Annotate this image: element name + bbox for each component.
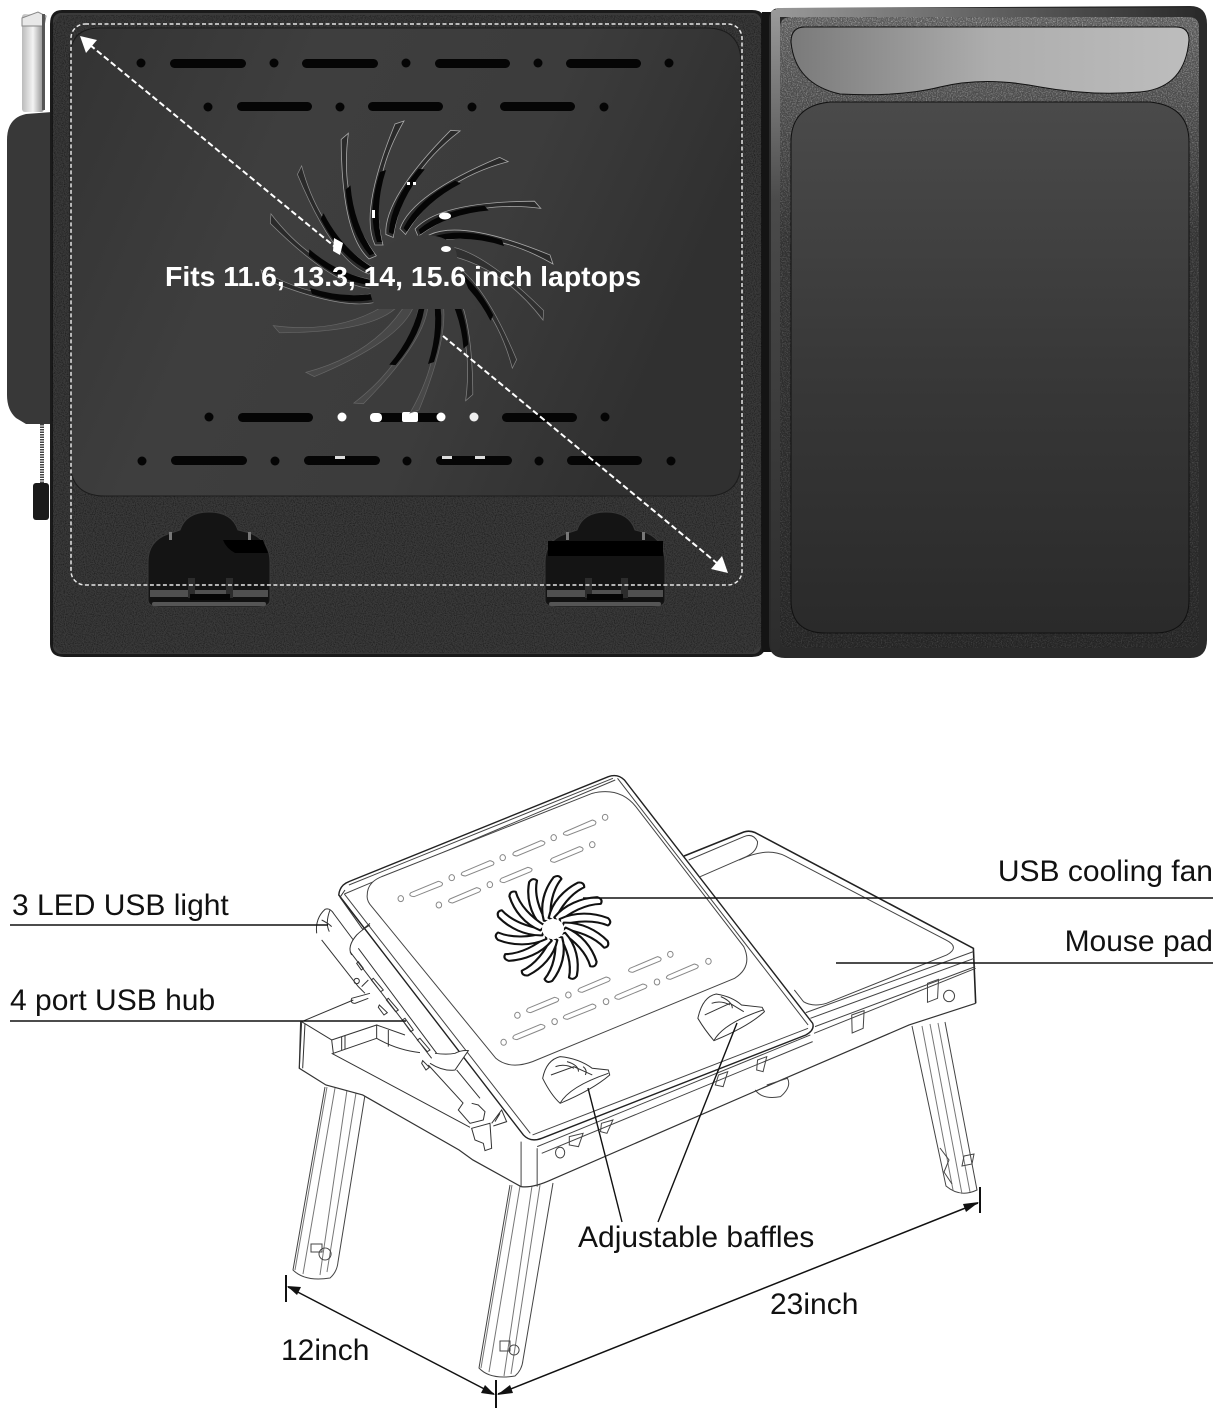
mouse pad surface	[791, 102, 1189, 633]
side USB hub tab	[7, 112, 52, 424]
icon: line drawing fan	[494, 875, 612, 983]
top vent row 2	[204, 102, 608, 112]
diagonal size arrow	[80, 36, 728, 573]
heading: laptop sizes: Fits 11.6, 13.3, 14, 15.6 inch laptops	[165, 261, 641, 292]
rear left leg	[293, 1087, 365, 1279]
bottom vent row 2	[138, 456, 676, 466]
right baffle	[545, 512, 665, 607]
cooling fan blades	[258, 118, 556, 416]
bottom vent row 1	[204, 412, 610, 422]
left baffle	[148, 512, 270, 607]
tray baffles	[543, 994, 764, 1103]
mouse pad deck	[299, 831, 976, 1187]
label: Adjustable baffles: Adjustable baffles	[578, 1221, 814, 1254]
rear right leg	[912, 1022, 977, 1194]
panel: laptop tray top view	[7, 10, 765, 657]
front left leg	[479, 1183, 553, 1377]
panel: mouse pad top view	[762, 6, 1207, 658]
panel edge	[769, 6, 1207, 658]
dimension: 23 inch width: 23inch	[770, 1288, 858, 1321]
wrist rest recess	[791, 27, 1189, 95]
top vent row 1	[136, 58, 674, 68]
panel hinge gap	[762, 12, 772, 652]
label: Mouse pad: Mouse pad	[1065, 925, 1213, 958]
label: USB cooling fan: USB cooling fan	[998, 855, 1213, 888]
dimension: 12 inch depth	[281, 1275, 496, 1408]
pen light arm	[22, 12, 46, 112]
textured frame	[780, 17, 1200, 649]
fan hub	[370, 235, 477, 309]
dimension: 12 inch depth: 12inch	[281, 1334, 369, 1367]
panel body	[50, 10, 765, 657]
tilted laptop tray	[339, 776, 813, 1140]
dimension: 23 inch width	[497, 1187, 980, 1395]
tray vents	[398, 814, 711, 1045]
table body and tilted tray	[299, 776, 976, 1187]
diagram: folding table line drawing	[293, 776, 977, 1377]
label: 3 LED USB light: 3 LED USB light	[12, 889, 229, 922]
cable spring and plug	[33, 424, 49, 520]
body front and side	[299, 1003, 976, 1187]
cooling plate	[70, 28, 741, 496]
USB hub side, light and tray recess	[299, 890, 507, 1151]
label: 4 port USB hub: 4 port USB hub	[10, 984, 215, 1017]
label: Adjustable baffles	[578, 1023, 814, 1254]
dashed size outline	[71, 24, 742, 585]
